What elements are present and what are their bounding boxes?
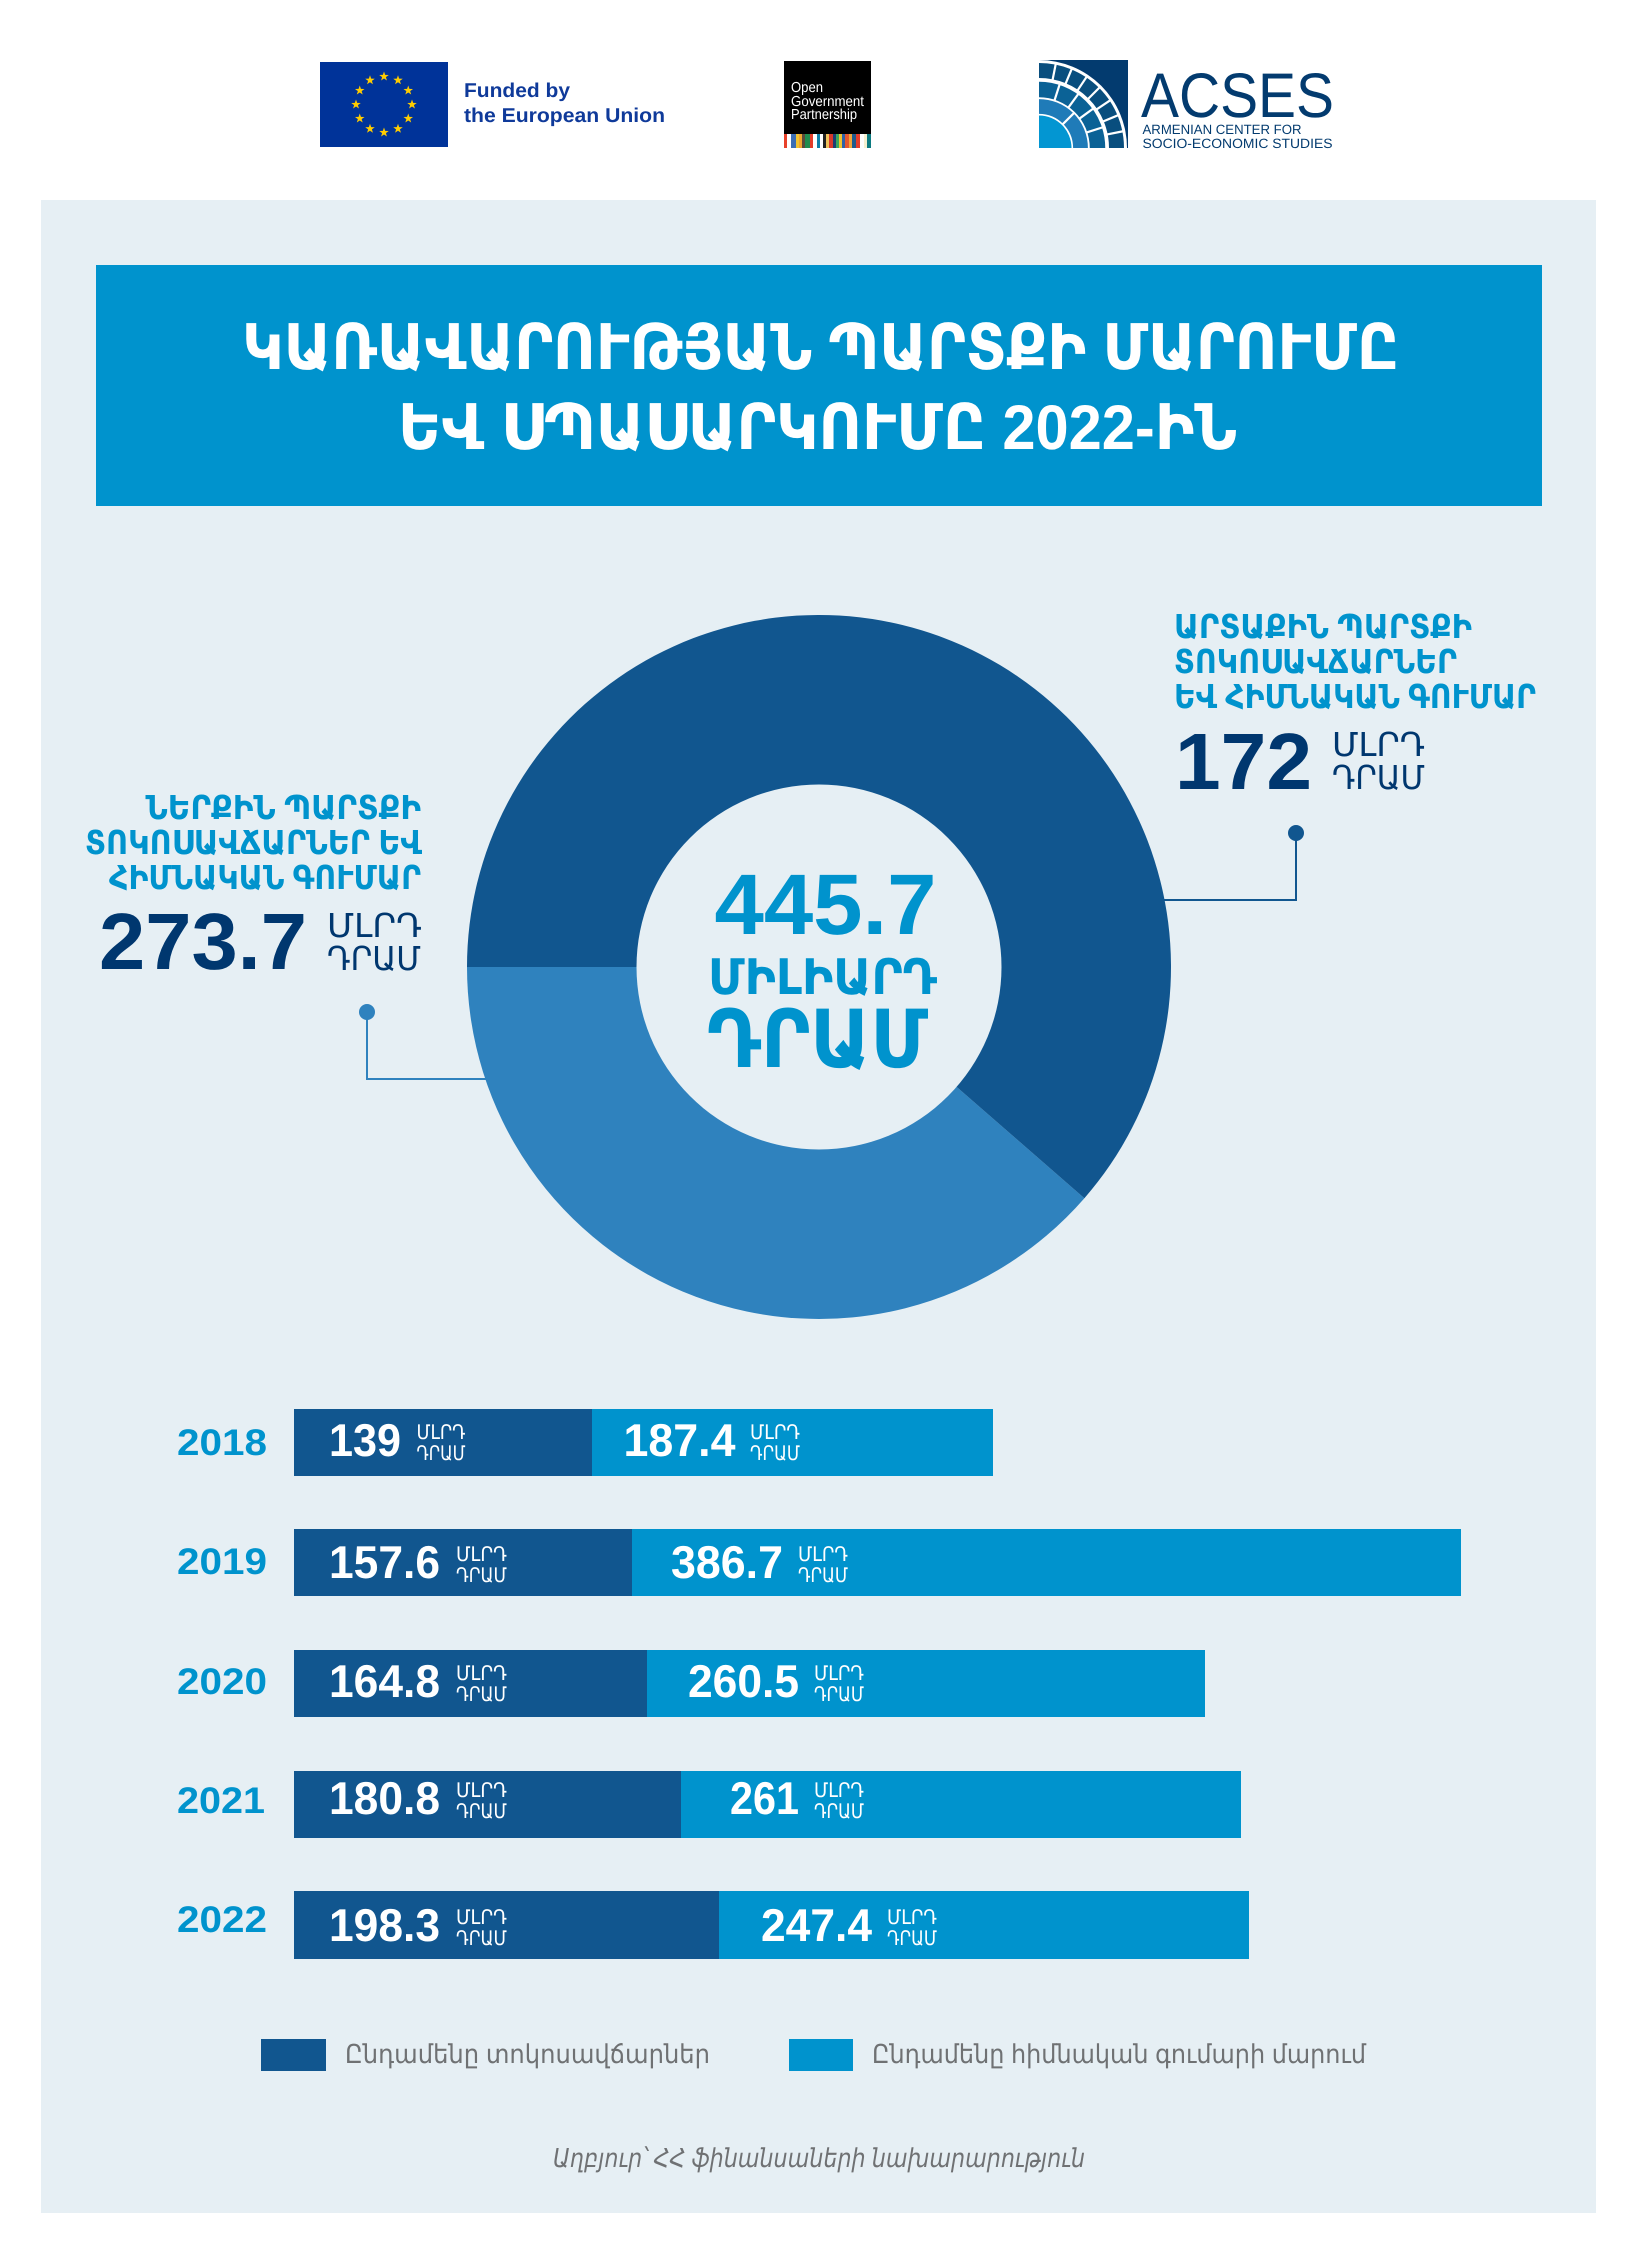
callout: right label	[1164, 608, 1536, 900]
row: 2020: ԴՐԱՄ	[456, 1684, 507, 1706]
row: 2019: ՄԼՐԴ	[798, 1544, 848, 1566]
text: funder name: Funded by	[464, 80, 571, 102]
callout: left label	[85, 789, 486, 1079]
logo: Open Government Partnership: Partnership	[791, 107, 857, 123]
row: 2019: 386.7	[671, 1536, 783, 1588]
label text: ԵՎ ՀԻՄՆԱԿԱՆ ԳՈՒՄԱՐ	[1174, 678, 1536, 715]
label text	[85, 789, 422, 896]
segment: dark blue	[467, 615, 1171, 1198]
row: 2021: ԴՐԱՄ	[456, 1801, 507, 1823]
row: 2018: ՄԼՐԴ	[416, 1422, 466, 1444]
centre total	[707, 857, 937, 1084]
label text: ՀԻՄՆԱԿԱՆ ԳՈՒՄԱՐ	[109, 859, 421, 896]
row: 2022: ՄԼՐԴ	[456, 1907, 507, 1929]
row: 2018: ԴՐԱՄ	[416, 1443, 466, 1465]
row: 2021: ՄԼՐԴ	[456, 1780, 507, 1802]
row: 2019: 157.6	[329, 1536, 440, 1588]
unit: ՄԼՐԴ	[327, 907, 422, 944]
row: 2018: 2018	[177, 1422, 267, 1463]
title banner	[96, 265, 1542, 506]
text: funder name: the European Union	[464, 105, 665, 127]
row: 2022: ԴՐԱՄ	[456, 1928, 507, 1950]
centre total: 445.7	[714, 857, 936, 953]
row: 2018: ՄԼՐԴ	[750, 1422, 800, 1444]
row: 2021: 180.8	[329, 1772, 440, 1824]
unit: ԴՐԱՄ	[1332, 759, 1425, 796]
label text: ՆԵՐՔԻՆ ՊԱՐՏՔԻ	[146, 789, 421, 826]
donut chart	[467, 615, 1171, 1319]
row: 2020: 164.8	[329, 1655, 440, 1707]
logo: Funded by the European Union	[320, 62, 665, 147]
centre total: ՄԻԼԻԱՐԴ	[708, 951, 937, 1005]
row: 2020: ՄԼՐԴ	[456, 1663, 507, 1685]
segment: light blue	[467, 967, 1084, 1319]
text: ACSES wordmark: SOCIO-ECONOMIC STUDIES	[1142, 136, 1332, 151]
row: 2018: ԴՐԱՄ	[750, 1443, 800, 1465]
value: 273.7	[99, 897, 307, 986]
row: 2021: 2021	[177, 1780, 265, 1821]
value: 172	[1175, 717, 1312, 806]
row: 2021: 261	[730, 1772, 799, 1824]
row: 2021: ԴՐԱՄ	[814, 1801, 864, 1823]
row: 2022	[177, 1891, 1249, 1959]
row: 2020: ԴՐԱՄ	[814, 1684, 864, 1706]
logo: Open Government Partnership: Government	[791, 94, 864, 110]
label text: ՏՈԿՈՍԱՎՃԱՐՆԵՐ ԵՎ	[85, 824, 422, 861]
unit	[1332, 726, 1425, 796]
legend	[261, 2039, 1366, 2071]
unit	[327, 907, 422, 977]
label text: ԱՐՏԱՔԻՆ ՊԱՐՏՔԻ	[1174, 608, 1472, 645]
row: 2019: 2019	[177, 1541, 267, 1582]
label text	[1174, 608, 1536, 715]
row: 2022: 247.4	[761, 1899, 872, 1951]
icon: ACSES quarter-circle mark	[1039, 60, 1128, 148]
row: 2020: ՄԼՐԴ	[814, 1663, 864, 1685]
logo: Open Government Partnership	[784, 61, 871, 148]
centre total: ԴՐԱՄ	[707, 995, 929, 1084]
icon: EU flag	[320, 62, 448, 147]
title: ԵՎ ՍՊԱՍԱՐԿՈՒՄԸ 2022-ԻՆ	[398, 393, 1237, 463]
text: ACSES wordmark: ARMENIAN CENTER FOR	[1142, 122, 1302, 137]
row: 2021: ՄԼՐԴ	[814, 1780, 864, 1802]
text: ACSES wordmark: ACSES	[1141, 61, 1334, 131]
unit: ՄԼՐԴ	[1332, 726, 1425, 763]
stacked bar chart	[177, 1409, 1461, 1959]
colour stripes	[784, 134, 871, 148]
unit: ԴՐԱՄ	[327, 940, 421, 977]
logo: Open Government Partnership: Open	[791, 80, 823, 96]
row: 2018	[177, 1409, 993, 1476]
row: 2020: 2020	[177, 1661, 267, 1702]
row: 2022: ՄԼՐԴ	[887, 1907, 937, 1929]
text: funder name	[464, 80, 665, 127]
row: 2019: ՄԼՐԴ	[456, 1544, 507, 1566]
row: 2022: 198.3	[329, 1899, 440, 1951]
logo: ACSES	[1039, 60, 1334, 151]
row: 2021	[177, 1771, 1241, 1838]
row: 2022: ԴՐԱՄ	[887, 1928, 937, 1950]
row: 2020	[177, 1650, 1205, 1717]
legend item: interest: Ընդամենը տոկոսավճարներ	[345, 2039, 710, 2069]
label text: ՏՈԿՈՍԱՎՃԱՐՆԵՐ	[1174, 643, 1457, 680]
leader line	[1164, 825, 1304, 900]
row: 2018: 187.4	[624, 1414, 736, 1466]
row: 2019: ԴՐԱՄ	[456, 1565, 507, 1587]
row: 2018: 139	[329, 1414, 401, 1466]
row: 2019: ԴՐԱՄ	[798, 1565, 848, 1587]
title	[242, 313, 1399, 463]
row: 2020: 260.5	[688, 1655, 799, 1707]
row: 2022: 2022	[177, 1899, 267, 1940]
donut hole	[636, 784, 1002, 1150]
legend item: principal: Ընդամենը հիմնական գումարի մարում	[872, 2039, 1366, 2069]
leader line	[359, 1004, 486, 1079]
source note: Աղբյուր՝ ՀՀ ֆինանսաների նախարարություն	[553, 2143, 1085, 2173]
title: ԿԱՌԱՎԱՐՈՒԹՅԱՆ ՊԱՐՏՔԻ ՄԱՐՈՒՄԸ	[242, 313, 1399, 383]
row: 2019	[177, 1529, 1461, 1596]
